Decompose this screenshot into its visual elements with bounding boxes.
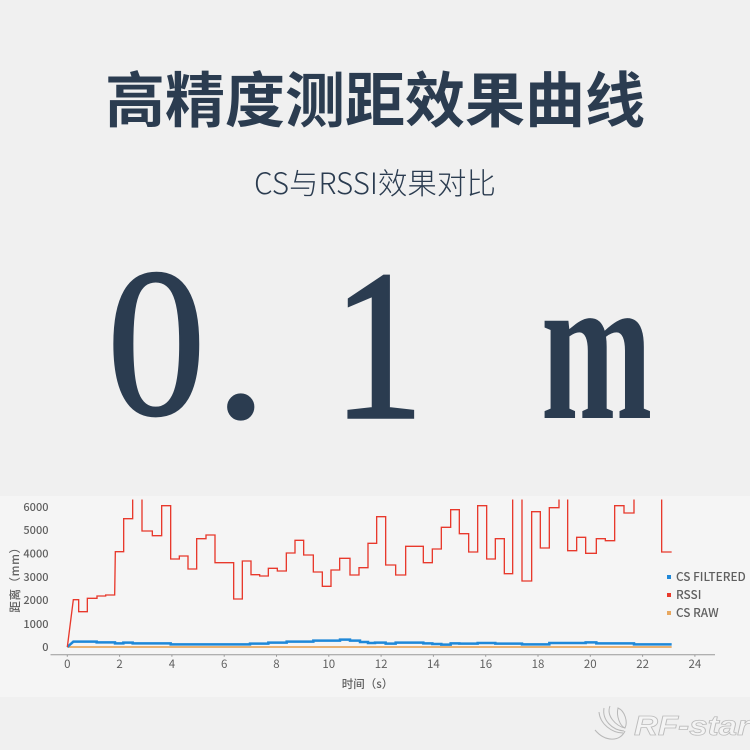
legend (667, 568, 746, 621)
title: 高精度测距效果曲线 (105, 53, 645, 140)
legend item: CS RAW: CS RAW (676, 604, 719, 621)
big figure: 0.1 m: 1 (333, 227, 424, 463)
x axis tick labels: 22 (636, 656, 649, 672)
line: CS FILTERED (67, 640, 672, 647)
y axis tick labels: 1000 (23, 616, 48, 632)
x axis tick labels: 16 (479, 656, 492, 672)
y axis tick labels: 4000 (23, 546, 48, 562)
axes (50, 655, 715, 657)
subtitle: CS与RSSI效果对比 (254, 161, 496, 203)
big figure: 0.1 m: 0 (107, 227, 206, 461)
data lines (67, 483, 672, 647)
icon: signal arcs (595, 706, 626, 739)
big figure: 0.1 m: m (541, 230, 652, 465)
big figure: 0.1 m: . (213, 220, 268, 466)
y axis tick labels: 0 (42, 639, 48, 655)
x axis label: 时间（s） (342, 676, 393, 692)
x axis tick labels (64, 656, 702, 672)
y axis tick labels: 6000 (23, 499, 48, 515)
line: CS RAW (67, 646, 672, 648)
legend item: RSSI: RSSI (676, 586, 701, 603)
y axis tick labels: 3000 (23, 569, 48, 585)
panel: chart (9, 500, 746, 690)
x axis tick labels: 12 (375, 656, 387, 672)
x axis tick labels: 0 (64, 656, 70, 672)
legend item: CS FILTERED: CS FILTERED (676, 568, 746, 585)
x axis tick labels: 6 (221, 656, 227, 672)
x axis tick labels: 14 (427, 656, 440, 672)
x axis tick labels: 24 (689, 656, 702, 672)
x axis tick labels: 8 (273, 656, 280, 672)
x axis tick labels: 10 (322, 656, 335, 672)
line: RSSI (67, 483, 672, 647)
x axis tick labels: 20 (584, 656, 597, 672)
x axis tick labels: 18 (532, 656, 544, 672)
y axis tick labels (23, 499, 48, 655)
y axis tick labels: 5000 (23, 522, 48, 538)
x axis tick labels: 2 (116, 656, 123, 672)
x axis tick labels: 4 (169, 656, 176, 672)
y axis tick labels: 2000 (23, 592, 48, 608)
y axis label: 距离（mm） (7, 541, 23, 613)
logo text: RF-star (634, 710, 750, 741)
